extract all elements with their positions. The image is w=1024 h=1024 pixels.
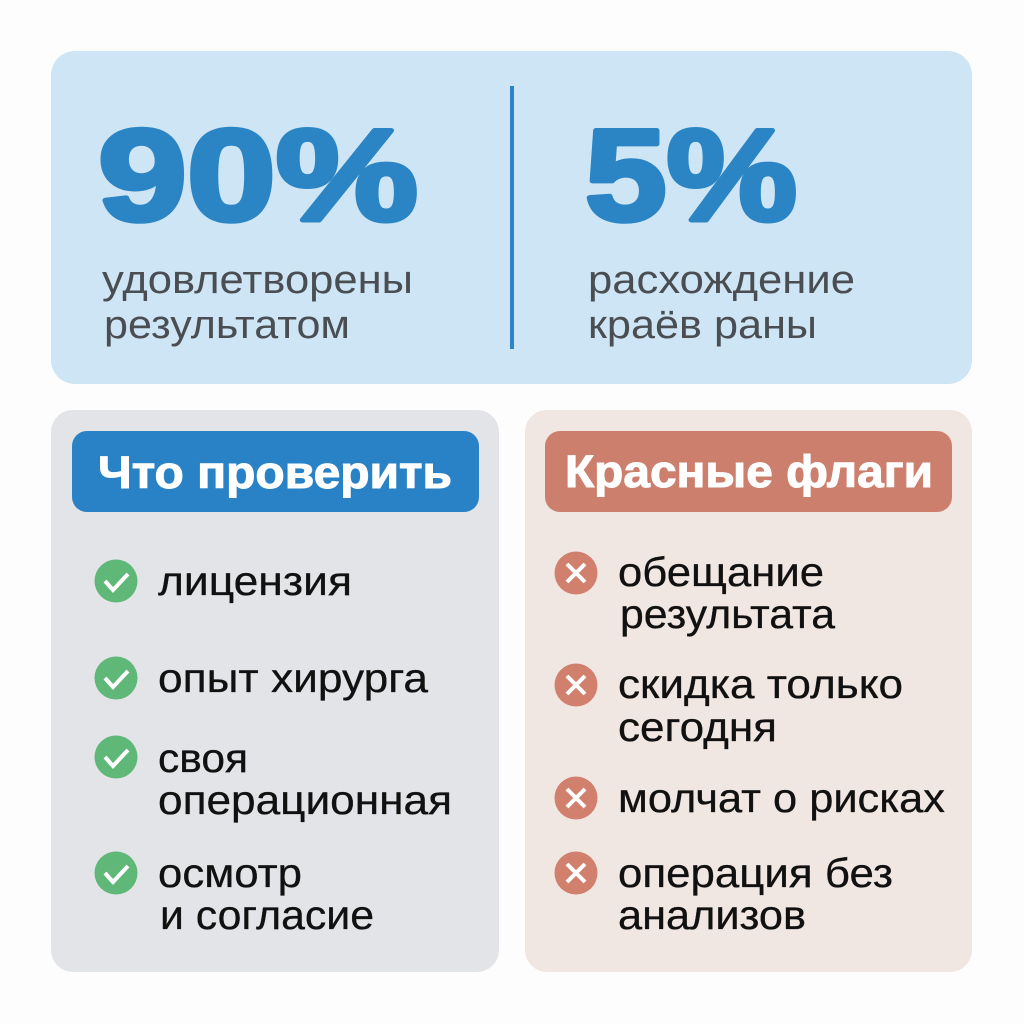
item: promised result: обещание [618, 549, 824, 595]
panel: red flags [525, 410, 972, 972]
item: license [94, 558, 352, 604]
item: examination and consent: осмотр [158, 850, 302, 896]
panel: what to check [51, 410, 499, 972]
item: license: лицензия [158, 558, 352, 604]
heading: what to check [72, 431, 479, 512]
heading: red flags [545, 431, 952, 512]
statistic: 5 percent: расхождение [588, 258, 855, 302]
panel: key statistics [51, 51, 972, 384]
item: discount today only: скидка только [618, 661, 903, 707]
item: discount today only [554, 661, 903, 750]
item: promised result [554, 549, 835, 637]
statistic: 5 percent [585, 102, 855, 347]
item: silent about risks: молчат о рисках [618, 775, 946, 821]
item: surgery without tests: анализов [618, 892, 806, 938]
item: own operating room: операционная [158, 777, 452, 823]
statistic: 5 percent: краёв раны [588, 303, 817, 347]
item: own operating room [94, 735, 452, 823]
heading: what to check: Что проверить [98, 447, 452, 498]
divider line [510, 86, 514, 349]
item: own operating room: своя [158, 735, 248, 781]
statistic: 90 percent: 90% [98, 102, 418, 248]
statistic: 5 percent: 5% [585, 102, 797, 248]
statistic: 90 percent: результатом [104, 303, 350, 347]
heading: red flags: Красные флаги [565, 446, 933, 497]
item: surgery without tests [554, 850, 893, 938]
item: examination and consent: и согласие [160, 892, 374, 938]
item: discount today only: сегодня [618, 704, 777, 750]
item: examination and consent [94, 850, 374, 938]
item: promised result: результата [620, 591, 835, 637]
item: surgeon experience: опыт хирурга [158, 655, 428, 701]
statistic: 90 percent [98, 102, 418, 347]
item: surgery without tests: операция без [618, 850, 893, 896]
statistic: 90 percent: удовлетворены [102, 258, 413, 302]
